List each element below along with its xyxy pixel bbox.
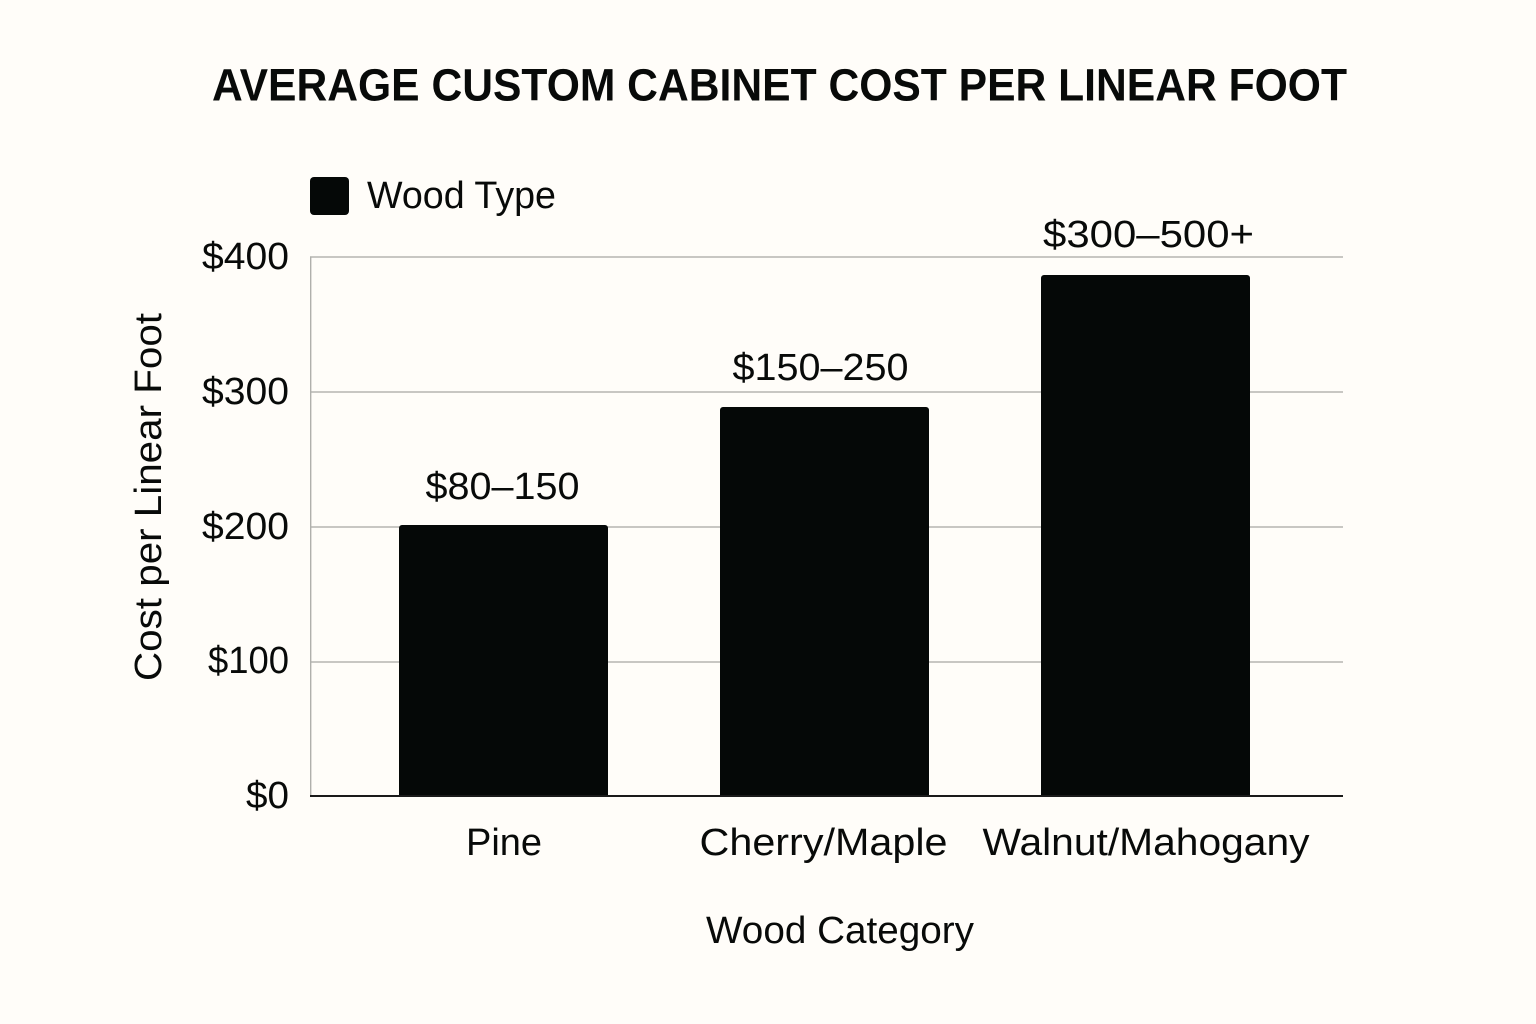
bar: Pine — [399, 525, 608, 797]
value labels: $150–250 — [732, 347, 908, 389]
category labels: Cherry/Maple — [700, 822, 948, 864]
y axis tick labels: $300 — [202, 371, 289, 413]
category labels — [466, 822, 1310, 864]
category labels: Pine — [466, 822, 542, 864]
y axis tick labels: $200 — [202, 506, 289, 548]
y axis title: Cost per Linear Foot — [128, 313, 170, 681]
y axis tick labels: $100 — [208, 640, 289, 682]
legend swatch — [310, 177, 349, 215]
y axis tick labels: $400 — [202, 236, 289, 278]
x axis title: Wood Category — [706, 910, 974, 952]
y axis tick labels — [202, 236, 289, 817]
value labels: $300–500+ — [1043, 214, 1254, 256]
legend — [310, 175, 556, 217]
y axis tick labels: $0 — [246, 775, 289, 817]
title: AVERAGE CUSTOM CABINET COST PER LINEAR FOOT — [212, 60, 1347, 110]
bar chart — [399, 275, 1250, 797]
bar: Cherry/Maple — [720, 407, 929, 797]
bar: Walnut/Mahogany — [1041, 275, 1250, 797]
legend label: Wood Type — [367, 175, 556, 217]
category labels: Walnut/Mahogany — [982, 822, 1310, 864]
value labels: $80–150 — [426, 466, 580, 508]
value labels — [426, 214, 1254, 508]
